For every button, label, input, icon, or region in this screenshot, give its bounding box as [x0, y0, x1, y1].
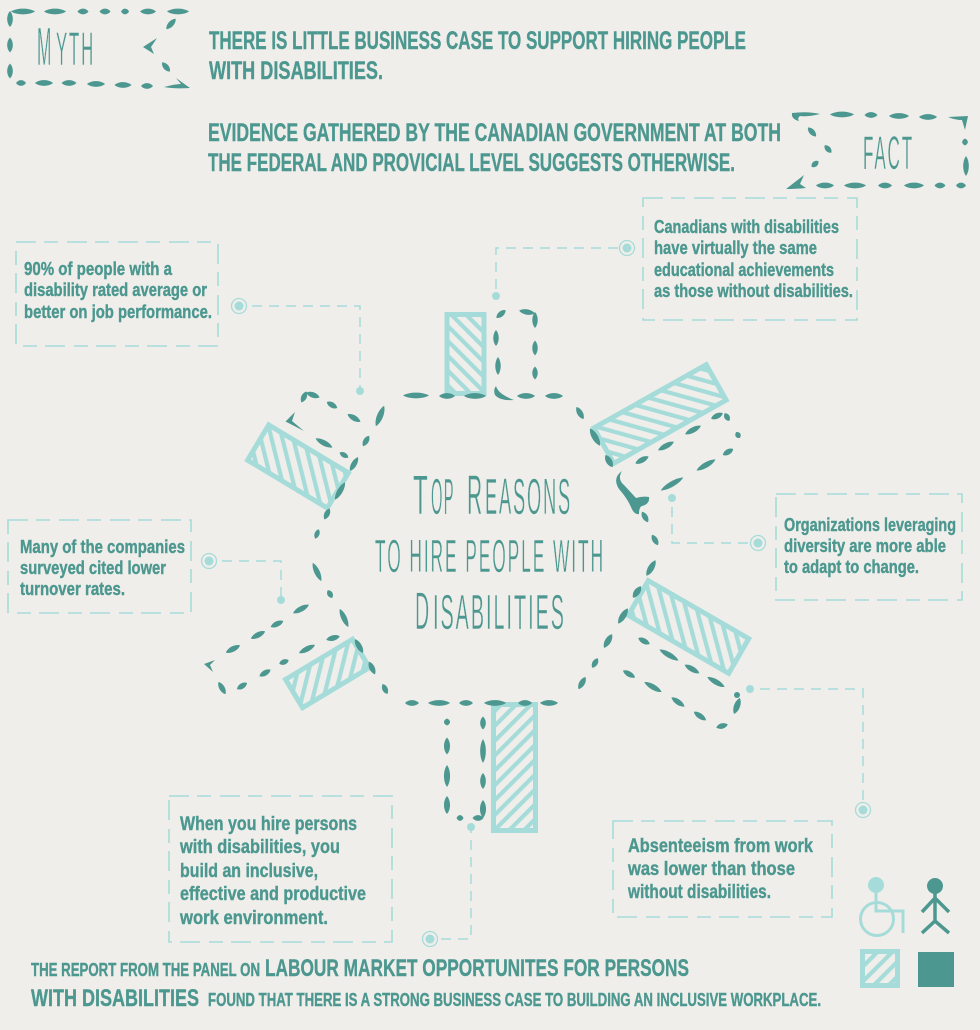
myth statement: THERE IS LITTLE BUSINESS CASE TO SUPPORT HIRING PEOPLE [209, 27, 746, 55]
connector: turnover [202, 554, 285, 604]
callout: diversity: diversity are more able [784, 536, 946, 556]
legend: person with disability icon [860, 877, 903, 936]
callout: turnover: surveyed cited lower [20, 558, 166, 578]
non-disabled bar outline: turnover [204, 602, 340, 695]
callout: job performance: better on job performance. [24, 302, 212, 322]
legend: hatched swatch [862, 952, 898, 986]
myth statement: WITH DISABILITIES. [209, 57, 383, 85]
hatched bar: turnover [286, 639, 369, 708]
callout: absenteeism: was lower than those [627, 859, 795, 880]
title: T [413, 463, 430, 526]
callout: inclusive environment: When you hire persons [180, 814, 357, 835]
callout: absenteeism: without disabilities. [627, 882, 771, 903]
connector: job performance [232, 298, 364, 395]
callout: inclusive environment [169, 796, 392, 942]
footer statement: THE REPORT FROM THE PANEL ON [31, 960, 260, 980]
legend: person without disability icon [922, 878, 949, 933]
infographic: EASONS [485, 468, 572, 525]
callout: job performance [16, 242, 218, 346]
hatched bar: education [447, 314, 484, 394]
callout: education: have virtually the same [654, 238, 817, 258]
footer statement: WITH DISABILITIES [31, 985, 199, 1012]
callout: inclusive environment: effective and productive [180, 884, 366, 905]
callout: job performance: 90% of people with a [24, 259, 173, 279]
non-disabled bar outline: education [493, 308, 538, 400]
callout: absenteeism [613, 821, 832, 917]
callout: diversity [776, 494, 962, 600]
callout: education: Canadians with disabilities [654, 217, 839, 237]
legend: solid swatch [918, 952, 954, 987]
connector: education [492, 240, 634, 300]
octagon outline [310, 393, 660, 706]
hatched bar: job performance [248, 425, 348, 508]
title: D [415, 582, 431, 641]
footer statement [31, 955, 821, 1012]
callout: inclusive environment: with disabilities, you [179, 837, 340, 858]
footer statement: LABOUR MARKET OPPORTUNITES FOR PERSONS [265, 955, 689, 982]
non-disabled bar outline: absenteeism [622, 636, 743, 730]
fact statement: THE FEDERAL AND PROVICIAL LEVEL SUGGESTS OTHERWISE. [208, 149, 735, 177]
myth banner: M [37, 17, 53, 77]
callout: turnover: Many of the companies [20, 537, 185, 557]
callout: education: educational achievements [654, 260, 834, 280]
callout: inclusive environment: build an inclusive, [180, 861, 318, 882]
myth statement [209, 27, 746, 85]
callout: inclusive environment: work environment. [179, 908, 328, 929]
hatched bar: inclusive environment [494, 704, 536, 830]
non-disabled bar outline: inclusive environment [444, 716, 486, 821]
callout: job performance: disability rated average or [24, 280, 207, 300]
non-disabled bar outline: diversity [616, 411, 742, 514]
title: OP [431, 468, 455, 525]
hatched bar: diversity [594, 365, 726, 463]
fact statement [208, 119, 781, 177]
callout: education: as those without disabilities. [654, 281, 853, 301]
myth banner: YTH [56, 22, 95, 75]
non-disabled bar outline: job performance [286, 390, 362, 460]
connector: absenteeism [746, 685, 870, 818]
hatched bar: absenteeism [628, 581, 749, 673]
title [375, 463, 605, 641]
fact banner [786, 112, 969, 189]
infographic: TO HIRE PEOPLE WITH [375, 530, 605, 582]
callout: absenteeism: Absenteeism from work [628, 836, 813, 857]
connector: diversity [668, 494, 766, 550]
callout: diversity: to adapt to change. [784, 557, 919, 577]
callout: turnover: turnover rates. [20, 579, 125, 599]
callout: turnover [8, 520, 191, 613]
connector: inclusive environment [422, 823, 475, 946]
callout: education [643, 198, 857, 320]
myth banner [7, 9, 190, 89]
title: ISABILITIES [433, 586, 566, 640]
title: R [467, 463, 484, 526]
